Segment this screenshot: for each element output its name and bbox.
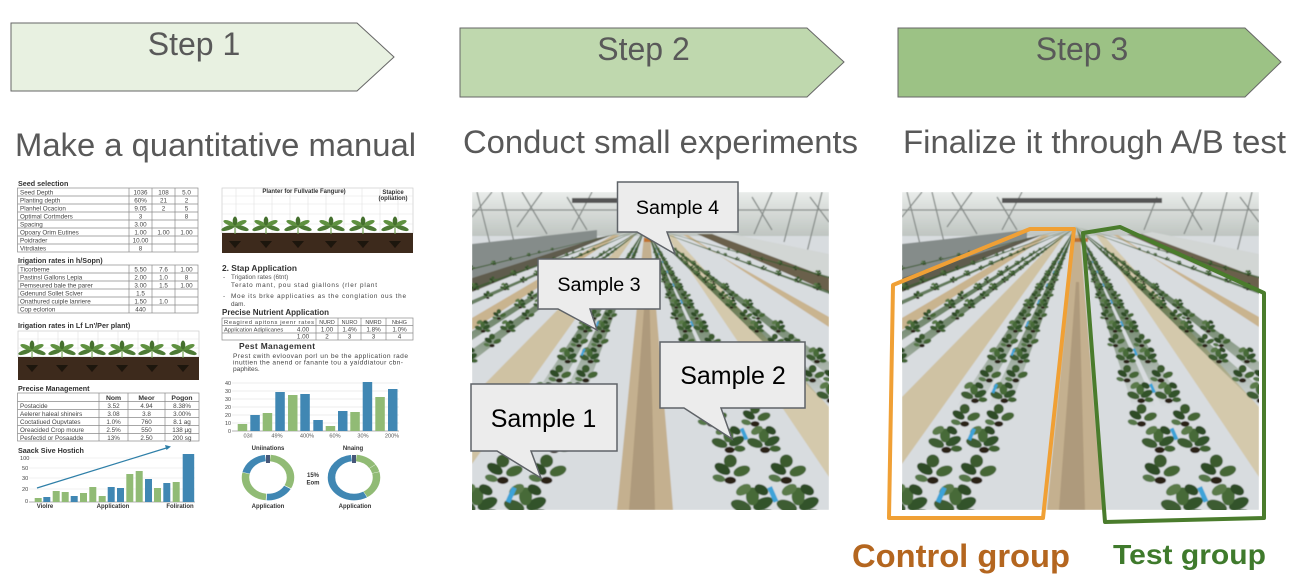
table: precise management: Meor <box>138 395 155 402</box>
table: precise management: 1.0% <box>106 419 121 426</box>
table: seed selection: 1.00 <box>134 230 147 236</box>
table: seed selection: 108 <box>158 190 169 196</box>
table: irrigation rates: 5.50 <box>134 266 147 274</box>
table: seed selection: 2 <box>162 206 166 212</box>
table: irrigation rates <box>18 256 198 314</box>
table: precise nutrient application: 2 <box>325 334 329 340</box>
table: irrigation rates: 1.0 <box>159 274 168 282</box>
table: seed selection: Spacing <box>20 222 43 228</box>
table: precise management: 3.52 <box>107 403 120 410</box>
bar chart: pest management: 200% <box>385 434 399 440</box>
table: irrigation rates: Irigation rates in h/Sopn) <box>18 256 103 265</box>
bar chart: pest management: 49% <box>271 434 283 440</box>
bar chart: pest management: 30% <box>357 434 369 440</box>
text block: step application: - <box>223 293 225 300</box>
table: precise management: 8.38% <box>173 403 191 410</box>
table: precise nutrient application: 4 <box>398 334 402 340</box>
table: irrigation rates: Pemseured bale the parer <box>20 282 93 290</box>
table: irrigation rates: Gdenund Sollet Sclver <box>20 290 83 298</box>
table: precise management: Coctatiued Oupvtates <box>20 419 81 426</box>
callout: sample 3: Sample 3 <box>557 274 641 296</box>
bar chart: saack sive hostich: Violre <box>37 504 54 510</box>
bar chart: pest management: 20 <box>225 413 231 419</box>
table: seed selection: Seed selection <box>18 179 68 188</box>
table: irrigation rates: 1.5 <box>159 282 168 290</box>
photo: greenhouse rows <box>0 192 1292 519</box>
panel: manual document <box>18 179 413 510</box>
table: irrigation rates: 1.5 <box>136 290 145 298</box>
table: precise nutrient application: 1.00 <box>321 326 334 334</box>
text block: pest management: Pest Management <box>239 341 315 351</box>
text block: pest management: inuttien the anend or fanante tou a yaiddiatour cbn- <box>233 360 403 366</box>
text block: step application: Terato mant, pou stad giallons (rler plant <box>231 282 377 289</box>
table: irrigation rates: 1.00 <box>180 266 193 274</box>
bar chart: pest management: 03/l <box>243 434 253 440</box>
table: seed selection <box>18 179 198 252</box>
text block: step application: Moe its brke applicaties as the conglation ous the <box>231 293 406 300</box>
callout: sample 4 <box>618 182 738 254</box>
bar chart: pest management: 30 <box>225 397 231 403</box>
heading: finalize through A/B test: Finalize it through A/B test <box>903 124 1286 160</box>
table: seed selection: Vitrdiates <box>20 246 46 252</box>
table: precise management: 2.5% <box>106 427 121 434</box>
bar chart: pest management: 0 <box>228 429 231 435</box>
table: irrigation rates: 3.00 <box>134 282 147 290</box>
illustration: planter: Planter for Fullvatle Fangure) <box>262 189 346 195</box>
donut chart: nnaing <box>306 446 376 510</box>
table: seed selection: 60% <box>134 198 147 204</box>
table: seed selection: 8 <box>185 214 189 220</box>
table: precise nutrient application: 3 <box>372 334 376 340</box>
table: seed selection: 1.00 <box>180 230 193 236</box>
table: precise management: Nom <box>106 395 121 402</box>
table: precise nutrient application: NMRD <box>365 320 382 326</box>
text block: step application: - <box>223 274 225 281</box>
table: irrigation rates: Cop eclorion <box>20 306 56 314</box>
table: seed selection: 1036 <box>133 190 148 196</box>
callout: sample 4: Sample 4 <box>636 197 719 219</box>
table: seed selection: Optimal Cortmders <box>20 214 73 220</box>
table: irrigation rates: 7.6 <box>159 266 168 274</box>
table: seed selection: Poidrader <box>20 238 47 244</box>
text block: pest management: paphites. <box>233 366 260 373</box>
table: seed selection: 5.0 <box>182 190 191 196</box>
donut chart: uninations <box>246 446 290 510</box>
table: precise management: 550 <box>141 427 152 434</box>
table: precise management: 3.8 <box>142 411 151 418</box>
table: precise nutrient application: NbHG <box>392 320 407 326</box>
bar chart: pest management: 10 <box>225 421 231 427</box>
table: precise management: 3.00% <box>173 411 191 418</box>
text block: step application <box>222 263 406 308</box>
table: precise management: 760 <box>141 419 152 426</box>
table: precise management: 13% <box>107 435 120 442</box>
table: precise nutrient application: 1.4% <box>342 326 357 334</box>
table: precise nutrient application: 1.0% <box>392 326 407 334</box>
callout: sample 1: Sample 1 <box>491 405 596 433</box>
table: precise management: 3.08 <box>107 411 120 418</box>
table: irrigation rates: Ticorbeme <box>20 266 50 274</box>
table: precise nutrient application: 1.8% <box>366 326 381 334</box>
table: precise management: 4.94 <box>140 403 153 410</box>
table: precise nutrient application: Application Adiplicanes <box>224 328 283 334</box>
table: precise management: Oreacided Crop moure <box>20 427 85 434</box>
table: irrigation rates: Onathured cuiple lanriere <box>20 298 91 306</box>
bar chart: saack sive hostich: Foliration <box>166 504 194 510</box>
table: precise management: 200 sg <box>173 435 192 442</box>
table: seed selection: 8 <box>139 246 143 252</box>
illustration: planter <box>221 188 413 253</box>
table: precise nutrient application: 1.00 <box>297 334 310 340</box>
label: control group: Control group <box>852 538 1070 574</box>
table: precise management: Pogon <box>171 395 193 402</box>
text block: step application: dam. <box>231 301 245 308</box>
text block: pest management: Prest ɛwith evloovan porl un be the application rade <box>233 353 408 360</box>
bar chart: saack sive hostich: Saack Sive Hostich <box>18 446 84 455</box>
text block: pest management <box>233 341 408 373</box>
table: precise management: 8.1 ag <box>173 419 191 426</box>
table: precise management: Aelerer haleal shineirs <box>20 411 82 418</box>
table: seed selection: 21 <box>160 198 167 204</box>
text block: step application: Trigation rates (6tnt) <box>231 274 288 281</box>
table: irrigation rates: 440 <box>135 306 146 314</box>
arrow: step 1 <box>11 23 394 91</box>
text block: step application: 2. Stap Application <box>222 263 297 273</box>
table: precise nutrient application: Precise Nutrient Application <box>222 308 329 317</box>
heading: Step 1 label: Step 1 <box>148 26 240 62</box>
table: precise management: 2.50 <box>140 435 153 442</box>
table: irrigation rates: 8 <box>185 274 189 282</box>
illustration: irrigation per plant: Irigation rates in Lf Ln'/Per plant) <box>18 321 131 330</box>
table: irrigation rates: Pastinsl Gallons Lepia <box>20 274 83 282</box>
table: seed selection: Opoary Orim Eutines <box>20 230 79 236</box>
bar chart: pest management: 30 <box>225 389 231 395</box>
illustration: planter: (opliation) <box>378 196 408 202</box>
table: seed selection: Planhel Ocacion <box>20 206 66 212</box>
heading: Step 2 label: Step 2 <box>597 31 690 67</box>
label: test group: Test group <box>1113 539 1266 570</box>
heading: Step 3 label: Step 3 <box>1036 31 1128 67</box>
bar chart: pest management: 400% <box>300 434 314 440</box>
table: precise management: 138 µg <box>172 427 192 434</box>
callout: sample 1 <box>471 384 617 478</box>
table: irrigation rates: 1.50 <box>134 298 147 306</box>
photo: greenhouse rows <box>0 192 1292 519</box>
donut chart: nnaing: 15% <box>307 473 320 479</box>
bar chart: saack sive hostich: 0 <box>25 499 28 505</box>
arrow: step 2 <box>460 28 844 97</box>
arrow: step 3 <box>898 28 1281 97</box>
callout: sample 2: Sample 2 <box>680 362 786 390</box>
table: precise nutrient application: Reagired apitons jeenr rates <box>224 320 314 326</box>
table: seed selection: Seed Depth <box>20 190 54 196</box>
table: irrigation rates: 2.00 <box>134 274 147 282</box>
bar chart: saack sive hostich: 20 <box>22 487 28 493</box>
illustration: planter: Stapice <box>382 190 404 196</box>
table: irrigation rates: 1.00 <box>180 282 193 290</box>
donut chart: uninations: Application <box>252 504 285 510</box>
table: precise management <box>18 384 199 442</box>
bar chart: saack sive hostich <box>18 445 195 510</box>
table: seed selection: 3 <box>139 214 143 220</box>
table: seed selection: 9.05 <box>134 206 147 212</box>
table: seed selection: 5 <box>185 206 189 212</box>
outline: control group area <box>889 229 1074 518</box>
heading: conduct small experiments: Conduct small experiments <box>463 124 858 160</box>
bar chart: saack sive hostich: 30 <box>22 476 28 482</box>
panel: step 1 <box>11 23 416 510</box>
table: precise management: Precise Management <box>18 384 90 393</box>
table: precise management: Postacide <box>20 403 48 410</box>
bar chart: saack sive hostich: Application <box>97 504 130 510</box>
callout: sample 2 <box>660 342 805 439</box>
table: precise nutrient application <box>222 308 413 340</box>
table: precise nutrient application: NURO <box>342 320 357 326</box>
table: seed selection: 10.00 <box>133 238 149 244</box>
donut chart: nnaing: Eom <box>306 480 320 486</box>
table: seed selection: 2 <box>185 198 189 204</box>
callout: sample 3 <box>538 259 660 330</box>
donut chart: uninations: Uniinations <box>252 446 285 452</box>
heading: make a quantitative manual: Make a quantitative manual <box>15 127 416 163</box>
table: precise nutrient application: 4.00 <box>297 326 310 334</box>
table: precise management: Pesfectid or Posaadde <box>20 435 84 442</box>
bar chart: saack sive hostich: 100 <box>20 456 29 462</box>
bar chart: pest management: 40 <box>225 381 231 387</box>
table: seed selection: 3.00 <box>134 222 147 228</box>
donut chart: nnaing: Application <box>339 504 372 510</box>
illustration: irrigation per plant <box>18 321 199 380</box>
bar chart: pest management: 60% <box>329 434 341 440</box>
table: seed selection: Planting depth <box>20 198 61 204</box>
table: irrigation rates: 1.0 <box>159 298 168 306</box>
bar chart: saack sive hostich: 50 <box>22 466 28 472</box>
table: precise nutrient application: NURD <box>319 320 335 326</box>
table: seed selection: 1.00 <box>157 230 170 236</box>
outline: test group area <box>1083 227 1264 522</box>
bar chart: pest management <box>225 381 399 440</box>
table: precise nutrient application: 3 <box>348 334 352 340</box>
bar chart: pest management: 20 <box>225 405 231 411</box>
donut chart: nnaing: Nnaing <box>343 446 363 452</box>
